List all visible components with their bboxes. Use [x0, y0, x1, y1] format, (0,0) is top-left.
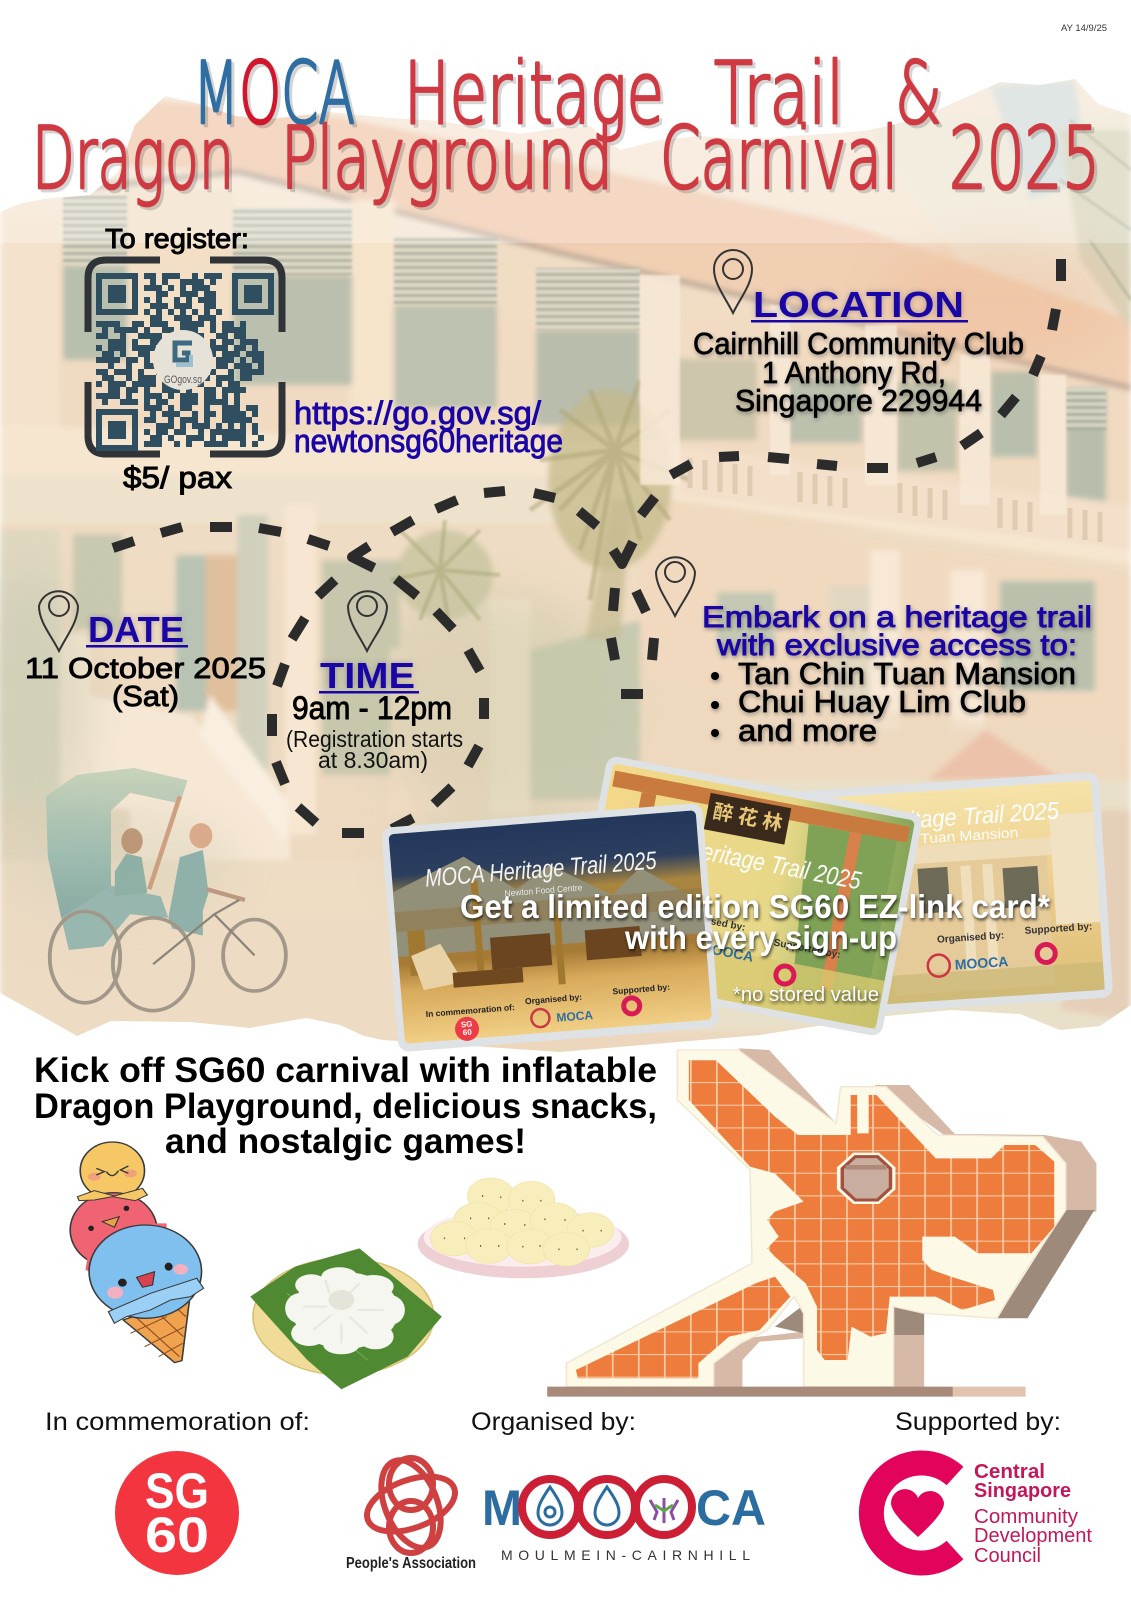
overlay above roofline — [1, 79, 1131, 243]
logo: Central Singapore CDC: Development — [974, 1525, 1092, 1547]
panel: location — [693, 250, 1024, 418]
logo: Central Singapore CDC: Central — [974, 1461, 1045, 1483]
rickshaw — [46, 768, 286, 1011]
trail list: Tan Chin Tuan Mansion — [738, 656, 1076, 691]
card: Tan Chin Tuan Mansion: Tuan Mansion — [920, 824, 1019, 847]
time text: 9am - 12pm — [292, 690, 452, 726]
date text: 11 October 2025 — [25, 653, 266, 685]
card: Newton Food Centre — [381, 803, 720, 1052]
icon: GoGov logo: GOgov.sg — [164, 374, 202, 386]
footer labels: In commemoration of: — [45, 1408, 310, 1436]
trail list — [711, 656, 1076, 748]
location address: 1 Anthony Rd, — [762, 355, 946, 390]
garden colour washes — [0, 240, 1120, 920]
window louvres — [63, 195, 1106, 430]
card credits: Supported by: — [612, 982, 671, 996]
location address — [693, 326, 1024, 418]
title: Dragon Playground Carnival 2025: Dragon — [32, 109, 234, 209]
logo: SG60: 60 — [145, 1507, 209, 1563]
heading: location: LOCATION — [753, 284, 964, 325]
date text: (Sat) — [112, 681, 179, 713]
card: Chui Huay Lim Club: Supported by: — [773, 937, 841, 961]
card: Tan Chin Tuan Mansion: Organised by: — [937, 930, 1005, 946]
logo: MOCA Moulmein-Cairnhill — [482, 1479, 766, 1563]
logo: People's Association — [346, 1452, 476, 1572]
trail heading — [702, 601, 1092, 662]
card: Tan Chin Tuan Mansion: MOOCA — [954, 953, 1009, 973]
icon: time pin — [348, 591, 387, 651]
stamp: AY 14/9/25 — [1061, 23, 1107, 33]
EZ-link card message: with every sign-up — [624, 919, 897, 956]
logo: MOCA Moulmein-Cairnhill: MOULMEIN-CAIRNHILL — [501, 1547, 750, 1563]
title: Heritage Trail &: Trail — [714, 44, 844, 144]
card: Tan Chin Tuan Mansion: itage Trail 2025 — [908, 797, 1060, 834]
logo: Central Singapore CDC: Community — [974, 1506, 1078, 1528]
heading: time: TIME — [320, 655, 415, 696]
footer labels — [45, 1408, 1061, 1436]
icon: ice cream cone — [70, 1142, 204, 1363]
price: $5/ pax — [123, 460, 233, 495]
panel: EZ-link cards — [381, 755, 1113, 1052]
card: Tan Chin Tuan Mansion — [777, 772, 1113, 1019]
balusters — [690, 458, 1100, 542]
logo: Central Singapore CDC: Council — [974, 1545, 1041, 1567]
location address: Cairnhill Community Club — [693, 326, 1024, 361]
card: Newton Food Centre: MOCA Heritage Trail 2025 — [424, 847, 658, 893]
trail list: and more — [738, 713, 877, 748]
card credits: Organised by: — [525, 992, 583, 1006]
carnival heading: Dragon Playground, delicious snacks, — [34, 1087, 657, 1126]
icon: GoGov logo — [153, 330, 213, 390]
balustrade columns — [640, 275, 1066, 515]
card credits — [425, 982, 673, 1044]
title — [32, 44, 1100, 209]
card: Newton Food Centre: Newton Food Centre — [504, 882, 583, 898]
dragon eye — [837, 1153, 895, 1204]
title: Dragon Playground Carnival 2025 — [32, 109, 1100, 209]
carnival heading: Kick off SG60 carnival with inflatable — [34, 1051, 657, 1090]
logo: Central Singapore CDC: Singapore — [974, 1480, 1071, 1502]
logo: MOCA Moulmein-Cairnhill: CA — [696, 1480, 766, 1536]
heading: date: DATE — [88, 609, 184, 650]
icon: location pin — [714, 250, 752, 313]
heading: to register: To register: — [105, 223, 249, 254]
panel: time — [286, 591, 463, 773]
logo: MOCA Moulmein-Cairnhill: M — [482, 1480, 522, 1536]
footer labels: Organised by: — [471, 1408, 636, 1436]
title: Heritage Trail &: & — [895, 44, 942, 144]
card: Chui Huay Lim Club: 醉花林 — [711, 800, 784, 836]
panel: watercolour building painting — [0, 0, 1131, 1060]
logo: SG60 — [115, 1451, 239, 1575]
panel: date — [25, 591, 266, 713]
arrow: dashed trail — [113, 259, 1061, 833]
logo: SG60: SG — [145, 1463, 209, 1519]
registration block — [88, 223, 563, 495]
QR code — [88, 260, 282, 454]
illustration: dragon playground — [547, 1048, 1096, 1397]
panel: heritage trail — [656, 557, 1092, 748]
card: Chui Huay Lim Club — [566, 755, 923, 1037]
title: MOCA: MOCA — [193, 44, 355, 144]
dragon cream outline — [566, 1050, 1066, 1387]
card credits: MOCA — [556, 1008, 594, 1025]
card credits: SG — [461, 1019, 473, 1029]
palm foliage washes — [548, 390, 672, 570]
registration note — [286, 726, 463, 773]
palm fronds — [390, 120, 1131, 630]
registration URL: newtonsg60heritage — [294, 423, 563, 459]
trail heading: Embark on a heritage trail — [702, 601, 1092, 634]
card: Chui Huay Lim Club: Organised by: — [678, 910, 746, 934]
carnival heading — [34, 1051, 657, 1161]
location address: Singapore 229944 — [735, 383, 982, 418]
icon: trail pin — [656, 557, 695, 616]
title: Dragon Playground Carnival 2025: Playground — [281, 109, 613, 209]
dragon orange tiles — [689, 1060, 1054, 1360]
card: Tan Chin Tuan Mansion: Supported by: — [1024, 921, 1093, 937]
date text — [25, 653, 266, 713]
icon: date pin — [39, 591, 78, 651]
registration URL — [294, 395, 563, 459]
trail list: Chui Huay Lim Club — [738, 684, 1026, 719]
card credits: 60 — [463, 1027, 473, 1037]
footer labels: Supported by: — [895, 1408, 1061, 1436]
EZ-link card message — [460, 888, 1050, 956]
title: Dragon Playground Carnival 2025: Carnival — [660, 109, 898, 209]
icon: plate of rice balls — [418, 1178, 629, 1278]
icon: kueh on banana leaf — [250, 1248, 442, 1389]
card: Chui Huay Lim Club: Heritage Trail 2025 — [684, 835, 863, 895]
trail heading: with exclusive access to: — [716, 629, 1077, 662]
stored value note: *no stored value — [733, 984, 879, 1006]
registration note: (Registration starts — [286, 726, 463, 752]
logo: Central Singapore CDC — [871, 1461, 1092, 1567]
title: Heritage Trail & — [404, 44, 942, 144]
card credits: In commemoration of: — [425, 1002, 515, 1019]
registration note: at 8.30am) — [318, 747, 428, 773]
registration URL: https://go.gov.sg/ — [294, 395, 541, 431]
carnival heading: and nostalgic games! — [165, 1122, 526, 1161]
dragon back shadow — [714, 1048, 1096, 1388]
logo: People's Association: People's Association — [346, 1555, 476, 1572]
dragon base — [547, 1387, 1026, 1397]
card: Chui Huay Lim Club: MOOOCA — [688, 937, 755, 965]
title: Heritage Trail &: Heritage — [404, 44, 664, 144]
EZ-link card message: Get a limited edition SG60 EZ-link card* — [460, 888, 1050, 925]
